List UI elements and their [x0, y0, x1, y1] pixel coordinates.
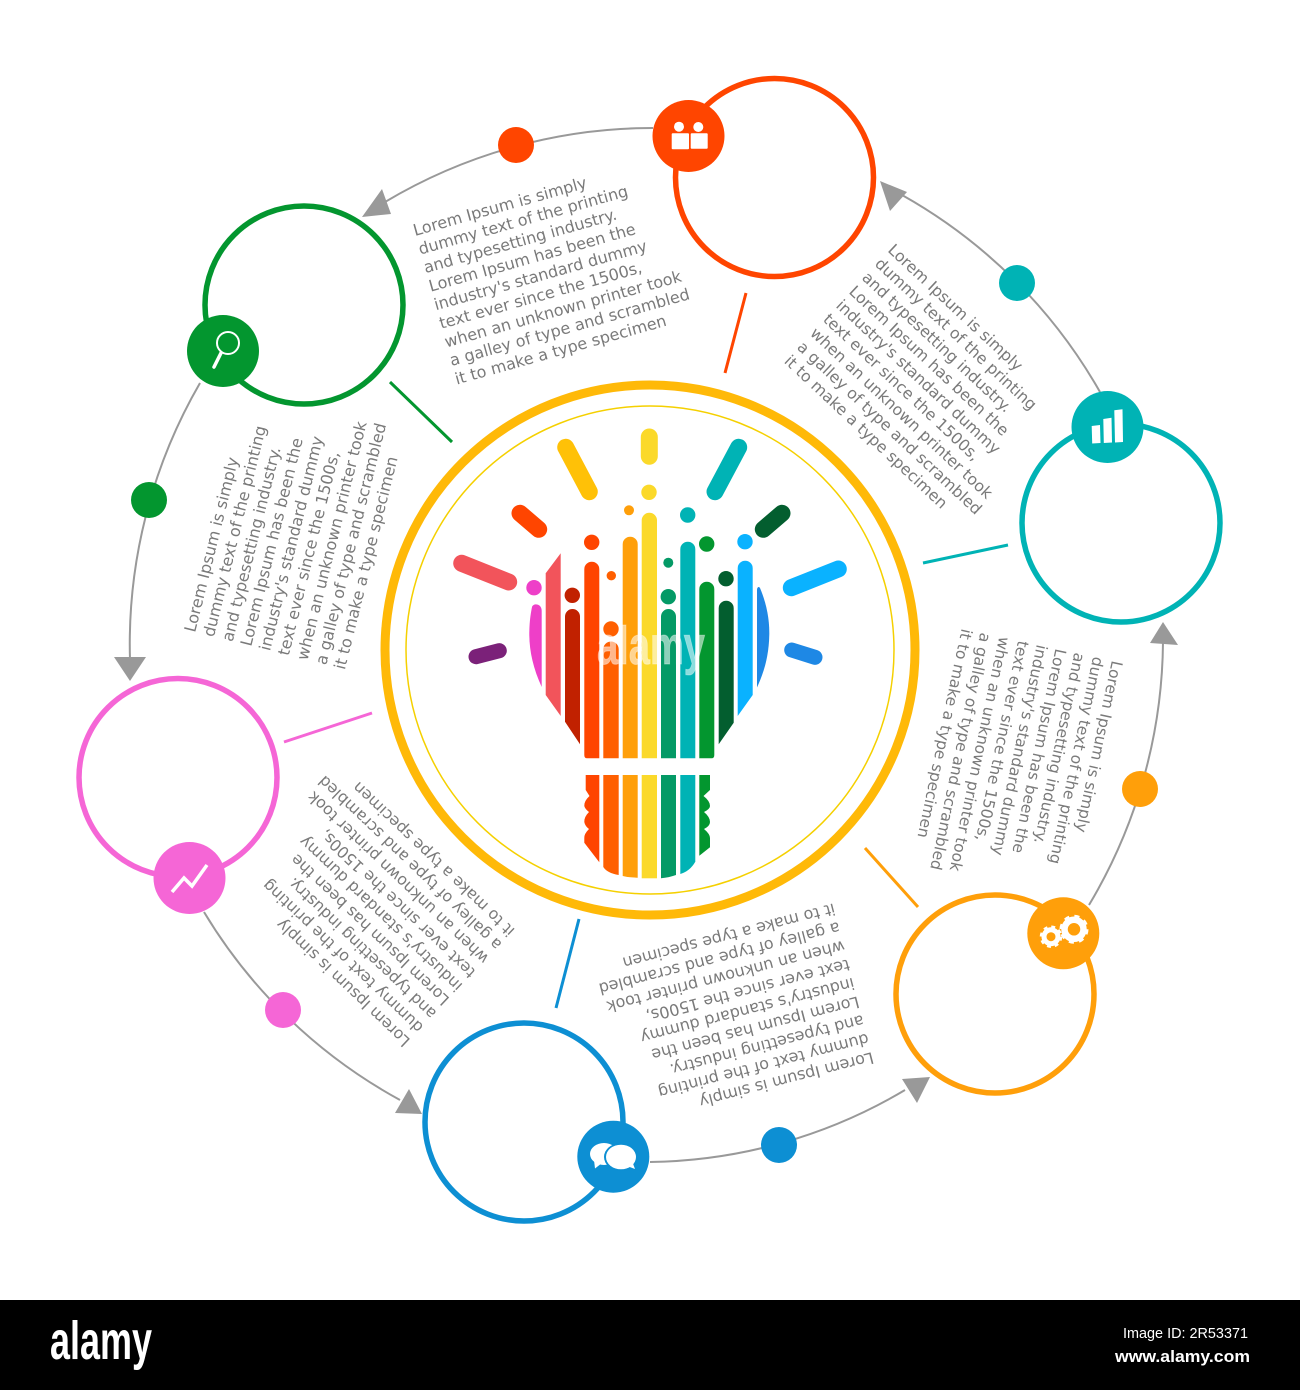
dot: teal — [999, 265, 1035, 301]
image id: Image ID: 2R53371 — [1123, 1325, 1248, 1342]
bulb rays — [462, 437, 838, 657]
text block: upper right: Lorem Ipsum is simply — [884, 240, 1027, 375]
text block: lower left: industry's standard dummy — [295, 832, 466, 996]
footer logo: alamy — [50, 1311, 152, 1371]
watermark: alamy — [597, 616, 705, 676]
text block: upper right: industry's standard dummy — [832, 296, 1005, 458]
text block: upper right: dummy text of the printing — [871, 254, 1041, 414]
text block: lower left: it to make a type specimen — [349, 778, 518, 941]
text block: upper right: a galley of type and scrambled — [794, 337, 986, 518]
text block: left: Lorem Ipsum has been the — [237, 436, 307, 648]
icon: magnifier — [187, 315, 259, 387]
panel: teal circle with bar chart icon — [999, 265, 1220, 622]
text block: lower right: when an unknown printer took — [604, 937, 847, 1017]
text block: lower right: a galley of type and scrambled — [597, 918, 842, 999]
text block: upper right: and typesetting industry. — [858, 268, 1016, 416]
icon: gears — [1027, 897, 1099, 969]
text block: left: and typesetting industry. — [218, 445, 285, 643]
central yellow rings — [385, 385, 915, 915]
panel: pink circle with trend icon — [79, 678, 301, 1028]
text block: lower left: Lorem Ipsum is simply — [272, 915, 414, 1051]
text block: lower left: Lorem Ipsum has been the — [287, 850, 453, 1010]
panel: red circle with people icon — [498, 78, 874, 276]
text block: upper right: text ever since the 1500s, — [819, 310, 984, 465]
text block: lower right: and typesetting industry. — [668, 1011, 866, 1079]
text block: left: a galley of type and scrambled — [312, 421, 390, 667]
text block: top: text ever since the 1500s, — [437, 258, 644, 333]
text block: lower right: dummy text of the printing — [656, 1030, 871, 1102]
dot: red — [498, 127, 534, 163]
arrowheads — [114, 181, 1178, 1114]
text block: lower left: a galley of type and scrambled — [314, 772, 505, 954]
text block: right: when an unknown printer took — [946, 635, 1013, 873]
text block: right: a galley of type and scrambled — [926, 631, 994, 872]
text block: left: when an unknown printer took — [293, 419, 371, 662]
panel: blue circle with speech bubbles icon — [425, 1023, 797, 1221]
text block: right: text ever since the 1500s, — [972, 639, 1032, 843]
text block: top: Lorem Ipsum is simply — [411, 173, 589, 240]
text block: top: industry's standard dummy — [432, 236, 649, 314]
text block: lower left: text ever since the 1500s, — [316, 826, 479, 982]
text block: left: text ever since the 1500s, — [274, 449, 343, 657]
text block: upper right: it to make a type specimen — [781, 351, 952, 512]
text block: lower right: Lorem Ipsum has been the — [649, 992, 861, 1064]
connector lines — [284, 293, 1008, 1008]
icon: trend line — [154, 842, 226, 914]
bulb screw base — [584, 775, 710, 878]
text block: top: and typesetting industry. — [421, 205, 619, 277]
text block: upper right: Lorem Ipsum has been the — [845, 282, 1013, 440]
bulb glass stripes — [529, 513, 769, 758]
footer bar — [0, 1300, 1300, 1390]
dot: pink — [265, 992, 301, 1028]
text block: lower right: Lorem Ipsum is simply — [697, 1048, 876, 1111]
text block: lower right: it to make a type specimen — [621, 899, 837, 973]
text block: top: it to make a type specimen — [453, 311, 669, 388]
bulb dots — [526, 485, 753, 637]
text block: top: dummy text of the printing — [416, 181, 630, 258]
text block: lower left: dummy text of the printing — [258, 876, 427, 1037]
text block: lower left: and typesetting industry. — [284, 874, 440, 1023]
text block: right: Lorem Ipsum is simply — [1072, 659, 1126, 834]
text block: lower right: industry's standard dummy — [638, 974, 857, 1047]
text block: right: dummy text of the printing — [1045, 655, 1107, 866]
text block: left: Lorem Ipsum is simply — [180, 455, 242, 634]
text block: top: a galley of type and scrambled — [447, 284, 692, 370]
text block: right: it to make a type specimen — [914, 627, 975, 840]
panel: orange circle with gears icon — [896, 771, 1158, 1093]
text block: right: and typesetting industry. — [1030, 651, 1088, 845]
icon: bar chart — [1072, 391, 1144, 463]
text block: left: industry's standard dummy — [255, 434, 327, 653]
text block: left: it to make a type specimen — [330, 454, 402, 671]
panel: green circle with magnifier icon — [131, 206, 403, 518]
text block: upper right: when an unknown printer took — [807, 323, 997, 503]
dot: orange — [1122, 771, 1158, 807]
icon: rainbow light bulb — [462, 437, 838, 878]
icon: people — [652, 100, 724, 172]
website: www.alamy.com — [1114, 1347, 1250, 1366]
dot: blue — [761, 1127, 797, 1163]
text block: left: dummy text of the printing — [199, 424, 270, 639]
text block: top: Lorem Ipsum has been the — [427, 219, 638, 296]
text block: right: Lorem Ipsum has been the — [1008, 647, 1069, 855]
text block: right: industry's standard dummy — [988, 643, 1051, 857]
icon: speech bubbles — [577, 1121, 649, 1193]
text block: top: when an unknown printer took — [442, 266, 684, 351]
text block: lower right: text ever since the 1500s, — [644, 955, 852, 1026]
dot: green — [131, 482, 167, 518]
gray cycle arrows — [130, 128, 1163, 1162]
text block: lower left: when an unknown printer took — [303, 787, 492, 968]
